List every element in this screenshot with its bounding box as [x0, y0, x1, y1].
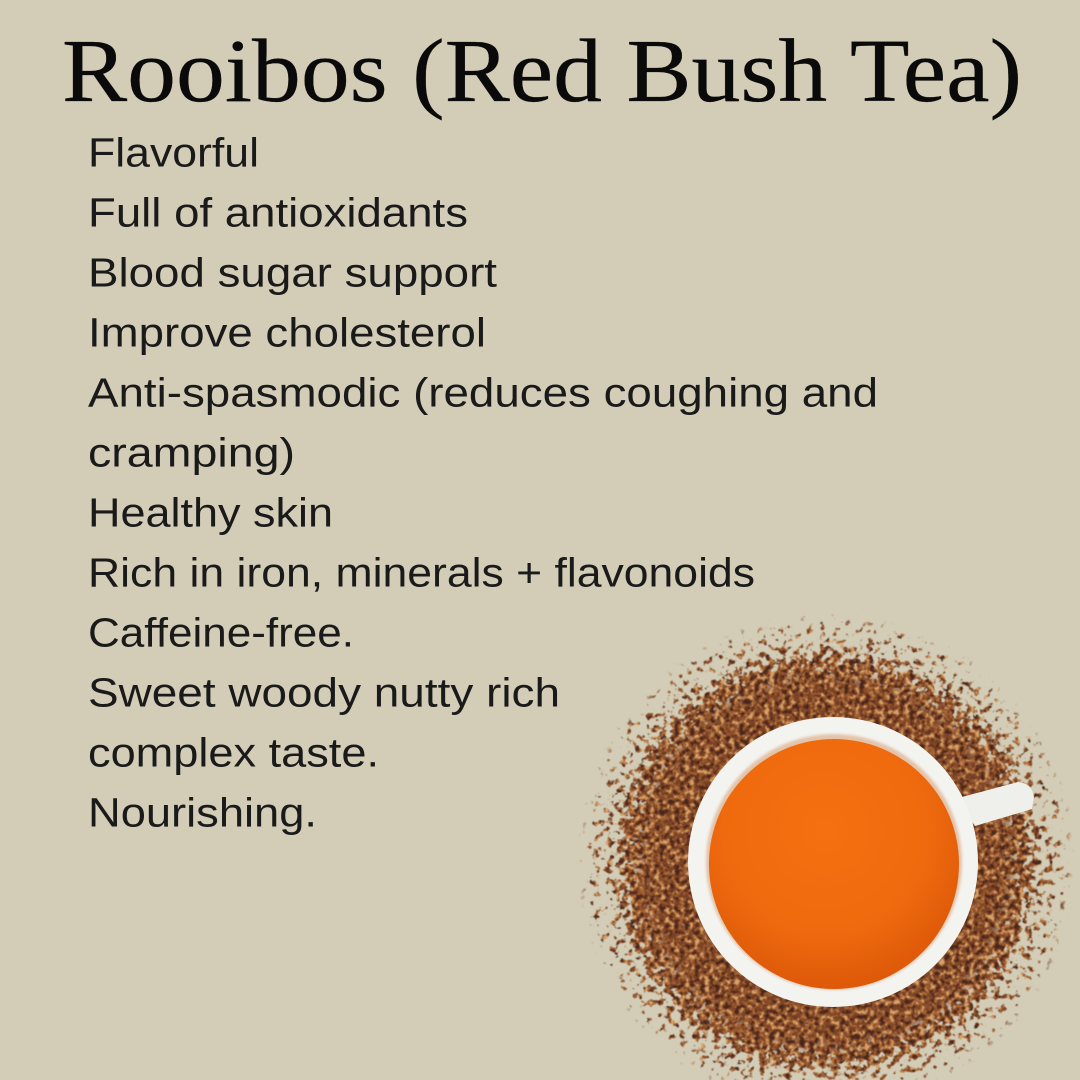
benefit: antioxidants: Full of antioxidants [88, 190, 468, 236]
benefit: flavorful: Flavorful [88, 130, 259, 176]
cup rim [688, 717, 978, 1007]
loose rooibos leaves [540, 580, 1080, 1080]
taste description line two: complex taste. [88, 730, 379, 776]
title: Rooibos (Red Bush Tea) [62, 22, 1022, 121]
benefit: anti-spasmodic: Anti-spasmodic (reduces coughing and [88, 370, 878, 416]
taste description line one: Sweet woody nutty rich [88, 670, 560, 716]
illustration: cup of rooibos tea on loose leaves [540, 580, 1080, 1080]
benefits list [88, 130, 878, 836]
benefit: cholesterol: Improve cholesterol [88, 310, 486, 356]
leaf pile underlay [641, 677, 1011, 1047]
benefit: healthy skin: Healthy skin [88, 490, 333, 536]
benefit: iron and minerals: Rich in iron, minerals + flavonoids [88, 550, 755, 596]
benefit: blood sugar: Blood sugar support [88, 250, 498, 296]
tea surface [706, 734, 962, 990]
benefit: caffeine-free: Caffeine-free. [88, 610, 354, 656]
tea shadow edge [706, 734, 962, 990]
benefit: anti-spasmodic continued: cramping) [88, 430, 295, 476]
tea liquid [709, 739, 959, 989]
cup handle [958, 782, 1034, 826]
benefit: nourishing: Nourishing. [88, 790, 317, 836]
